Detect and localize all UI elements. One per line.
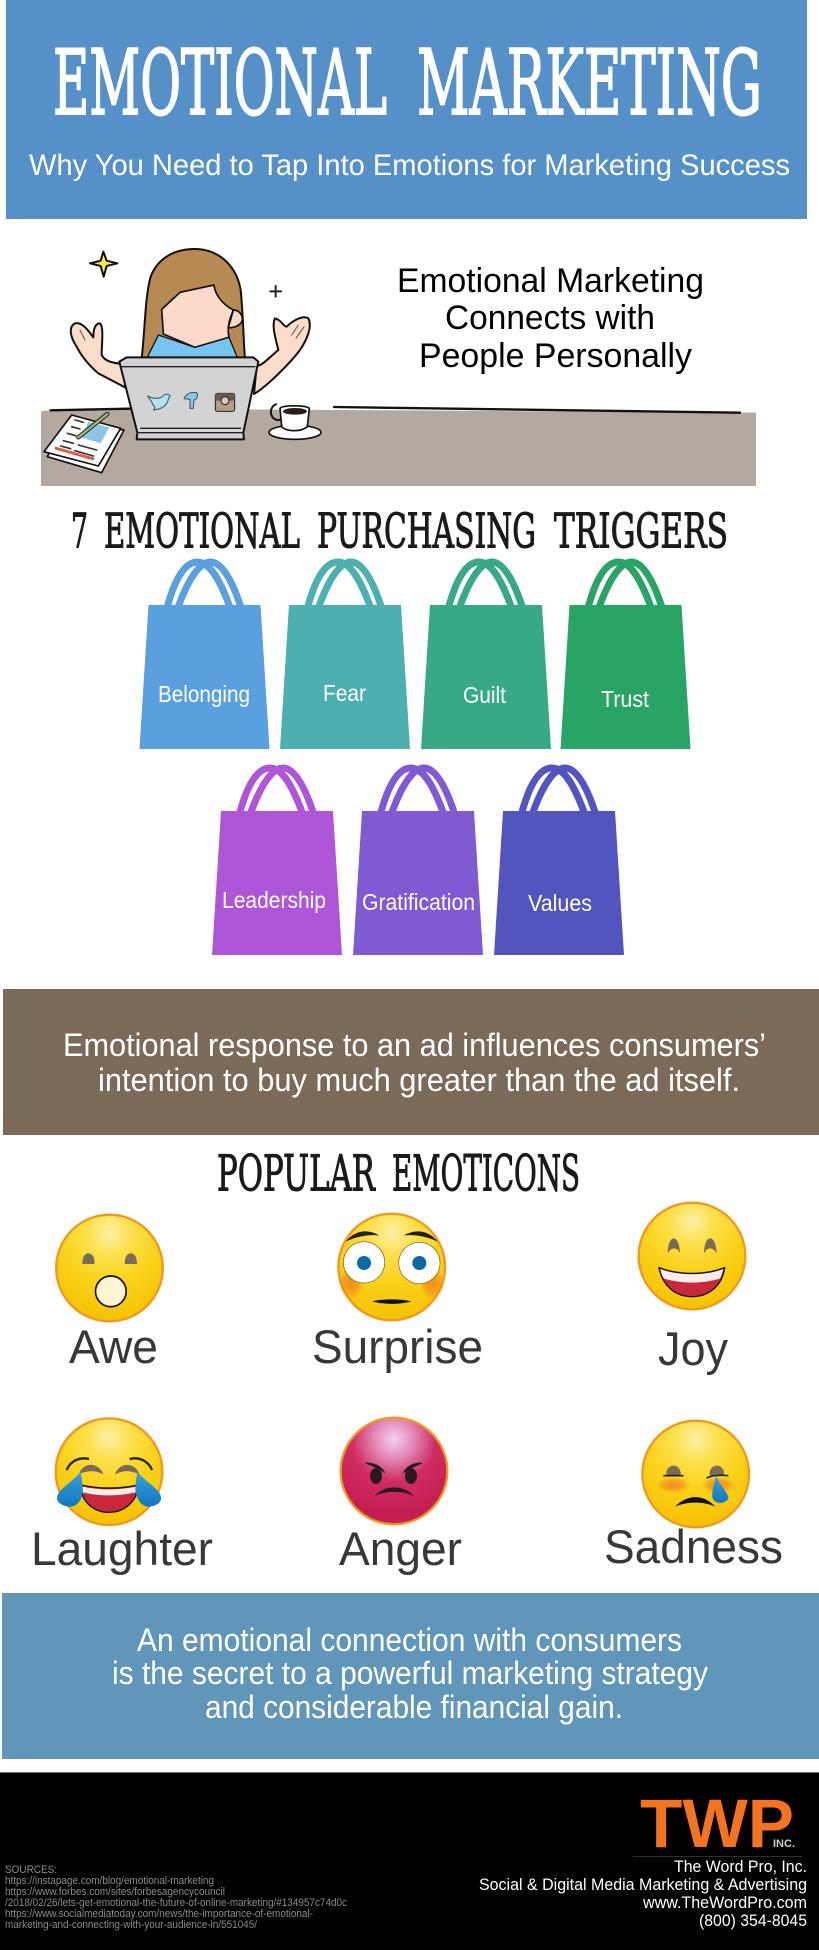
bag: leadership	[212, 768, 342, 955]
icon: bird	[147, 394, 170, 410]
company contact details: Social & Digital Media Marketing & Advertising	[479, 1875, 807, 1894]
heading: purchasing triggers: TRIGGERS	[554, 504, 728, 560]
icon: plus	[270, 286, 281, 297]
company contact details: The Word Pro, Inc.	[674, 1857, 807, 1876]
shirt	[147, 335, 237, 357]
sources: marketing-and-connecting-with-your-audience-in/551045/	[5, 1919, 258, 1931]
bag: belonging: Belonging	[158, 681, 250, 707]
label: surprise: Surprise	[312, 1320, 483, 1373]
brown callout band	[3, 989, 819, 1135]
blue callout band: and considerable financial gain.	[205, 1689, 623, 1725]
desk	[41, 409, 756, 486]
illustration: woman at laptop on desk	[41, 249, 756, 486]
face	[162, 285, 233, 347]
icon: papers and pen	[44, 414, 124, 473]
bag: guilt	[421, 562, 551, 749]
bag: fear	[280, 562, 410, 749]
logo: TWP Inc.: INC.	[773, 1838, 795, 1850]
icon: f	[184, 392, 197, 408]
label: sadness: Sadness	[604, 1520, 783, 1573]
heading: purchasing triggers: EMOTIONAL	[104, 504, 300, 560]
label: anger: Anger	[339, 1522, 462, 1575]
laptop	[119, 357, 258, 439]
ear	[228, 310, 242, 328]
bag: guilt: Guilt	[463, 682, 507, 708]
emoji: anger	[341, 1418, 447, 1524]
bag: values: Values	[528, 890, 592, 916]
heading: purchasing triggers	[71, 504, 728, 560]
bag: belonging	[140, 562, 270, 749]
subtitle: Why You Need to Tap Into Emotions for Marketing Success	[29, 149, 790, 182]
sources: https://www.forbes.com/sites/forbesagencycouncil	[5, 1886, 225, 1898]
intro statement: Emotional Marketing	[397, 262, 704, 300]
label: awe: Awe	[69, 1320, 158, 1373]
header panel	[6, 0, 807, 219]
blue callout band: An emotional connection with consumers	[137, 1622, 682, 1658]
footer panel	[0, 1772, 819, 1950]
sources: https://www.socialmediatoday.com/news/the-importance-of-emotional-	[5, 1908, 313, 1920]
left arm and hand	[71, 323, 125, 387]
bag: trust: Trust	[601, 686, 650, 712]
label: joy: Joy	[658, 1322, 728, 1375]
bag: values	[494, 768, 624, 955]
bag: gratification	[353, 768, 483, 955]
hair	[142, 249, 245, 358]
company contact details: www.TheWordPro.com	[642, 1893, 807, 1912]
emoji: joy	[639, 1203, 745, 1309]
emoji: surprise	[338, 1214, 445, 1320]
heading: purchasing triggers: 7	[71, 504, 88, 560]
logo: TWP Inc.: TWP	[640, 1785, 794, 1862]
emoji: awe	[56, 1215, 163, 1321]
icon: camera	[215, 393, 235, 411]
label: laughter: Laughter	[31, 1522, 213, 1575]
heading: popular emoticons: EMOTICONS	[392, 1144, 580, 1202]
right arm and hand	[254, 317, 310, 394]
icon: star	[90, 252, 117, 277]
company contact details: (800) 354-8045	[699, 1911, 807, 1930]
sources: https://instapage.com/blog/emotional-marketing	[5, 1875, 214, 1887]
blue callout band: is the secret to a powerful marketing strategy	[112, 1655, 708, 1691]
emoji: sadness	[642, 1421, 749, 1527]
brown callout band: Emotional response to an ad influences consumers’	[63, 1027, 766, 1063]
icon: coffee cup	[269, 404, 321, 439]
company contact details	[479, 1857, 807, 1930]
brown callout band: intention to buy much greater than the ad itself.	[98, 1062, 740, 1098]
title: EMOTIONAL	[53, 31, 387, 136]
intro statement: Connects with	[445, 299, 655, 337]
bag: leadership: Leadership	[222, 887, 326, 913]
sources: SOURCES:	[5, 1864, 57, 1876]
blue callout band	[2, 1593, 819, 1759]
heading: popular emoticons: POPULAR	[217, 1144, 376, 1202]
bag: gratification: Gratification	[362, 889, 475, 915]
emoji: laughter	[56, 1418, 162, 1525]
sources: /2018/02/26/lets-get-emotional-the-future-of-online-marketing/#134957c74d0c	[5, 1897, 347, 1909]
bag: fear: Fear	[323, 680, 366, 706]
intro statement	[397, 262, 704, 375]
bag: trust	[560, 562, 690, 749]
heading: purchasing triggers: PURCHASING	[317, 504, 536, 560]
sources	[5, 1864, 347, 1931]
intro statement: People Personally	[419, 337, 692, 375]
